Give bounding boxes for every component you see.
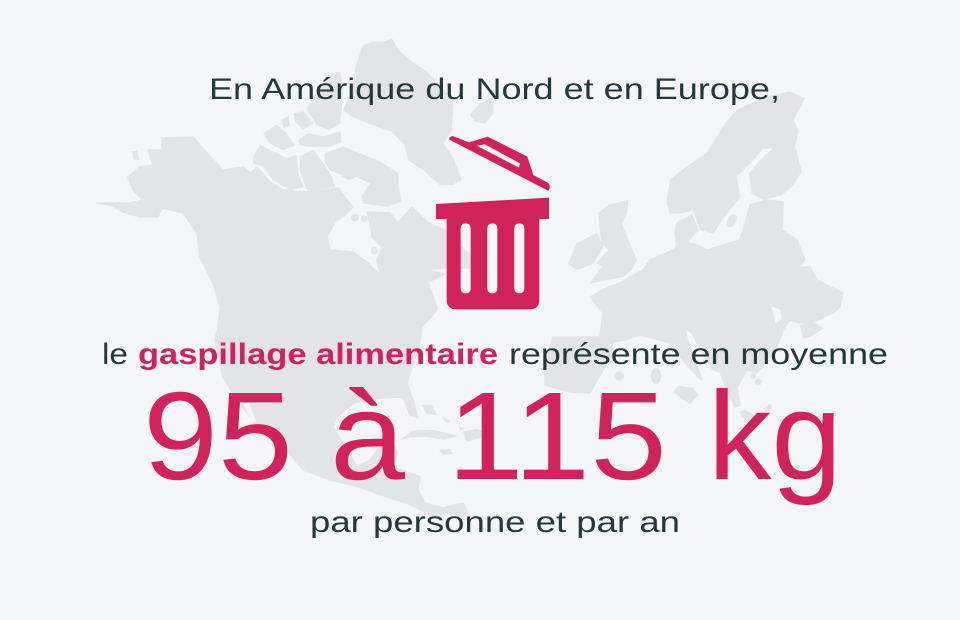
sentence: food waste xyxy=(102,338,888,371)
big number: 95 xyxy=(143,367,293,506)
closing text: par personne et par an xyxy=(310,506,680,539)
map: Mediterranean islands xyxy=(673,322,823,421)
icon: trash can with open lid xyxy=(436,136,550,309)
intro text: En Amérique du Nord et en Europe, xyxy=(209,73,780,106)
map: continental Europe xyxy=(545,200,843,407)
map: Great Britain xyxy=(590,200,637,283)
sentence: food waste: représente en moyenne xyxy=(509,338,888,371)
highlighted term: gaspillage alimentaire xyxy=(138,338,498,371)
world map background xyxy=(97,38,843,517)
map: Arctic islands xyxy=(253,72,402,207)
map: Europe xyxy=(470,92,843,421)
big number: à xyxy=(330,367,406,506)
icon: can body xyxy=(436,198,549,309)
map: Caribbean islands xyxy=(400,405,492,455)
map: Scandinavia and Finland xyxy=(667,92,805,233)
map: North America xyxy=(97,38,492,517)
map: Greenland xyxy=(343,38,462,185)
big number: kg xyxy=(708,367,842,506)
big number: 115 xyxy=(447,367,667,506)
map: Iceland xyxy=(470,97,493,123)
icon: lid xyxy=(449,136,550,191)
big number xyxy=(143,367,842,506)
sentence: food waste: le xyxy=(102,338,128,371)
map: Ireland xyxy=(568,233,603,270)
